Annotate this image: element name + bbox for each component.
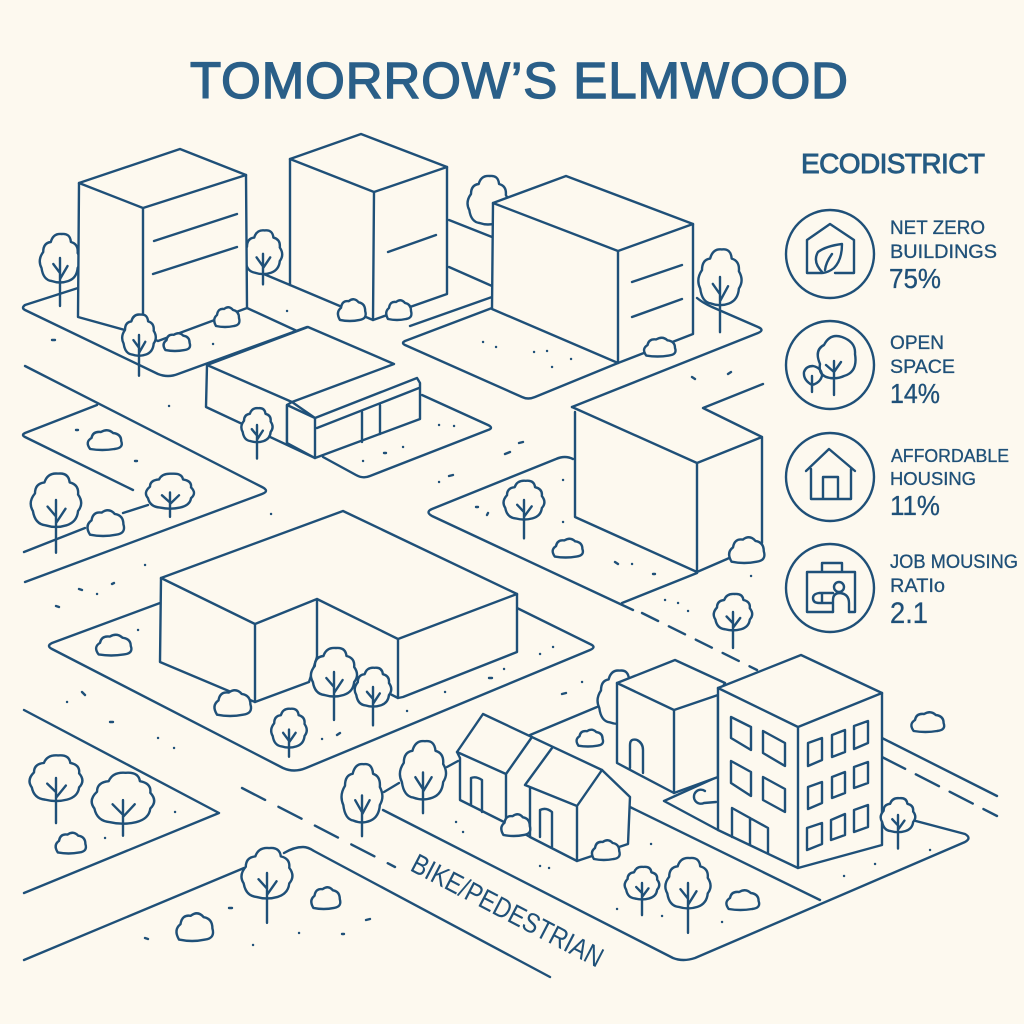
metric: net zero buildings: BUILDINGS: [890, 242, 997, 263]
building: top centre tower: [290, 134, 447, 320]
metric: net zero buildings: 75%: [889, 263, 941, 294]
metric: affordable housing: HOUSING: [890, 469, 976, 489]
metric: open space: [786, 321, 955, 409]
building: top left tower: [78, 149, 247, 341]
metric: open space: 14%: [890, 378, 940, 409]
building: four storey apartments: [718, 655, 882, 868]
street blocks: [23, 220, 997, 977]
shrubs: [56, 299, 944, 941]
metric: affordable housing: 11%: [890, 490, 940, 521]
metric: affordable housing: AFFORDABLE: [891, 446, 1009, 466]
building: two gabled houses: [457, 714, 630, 861]
metric: job housing ratio: JOB MOUSING: [890, 552, 1018, 573]
metric: open space: OPEN: [890, 333, 944, 354]
metric: affordable housing: [786, 433, 1009, 521]
windows: [731, 717, 868, 853]
trees behind buildings: [40, 176, 638, 724]
trees: [30, 249, 915, 933]
metric: job housing ratio: RATIo: [890, 576, 945, 597]
building: large central block: [160, 511, 517, 702]
building: low shopfront: [206, 327, 420, 458]
panel heading: ECODISTRICT: [801, 148, 985, 179]
metric: open space: SPACE: [890, 357, 955, 378]
panel: ecodistrict metrics: [786, 148, 1018, 632]
building: L-shaped block: [572, 384, 763, 572]
metric: job housing ratio: [786, 544, 1018, 632]
title: TOMORROW’S ELMWOOD: [190, 52, 848, 109]
metric: net zero buildings: [786, 210, 997, 298]
metric: job housing ratio: 2.1: [890, 597, 928, 630]
metric: net zero buildings: NET ZERO: [890, 218, 985, 239]
building: small annex: [617, 660, 725, 793]
pavement dots: [52, 311, 930, 945]
bike lane label: BIKE/PEDESTRIAN: [406, 848, 609, 973]
building: top right block: [492, 176, 693, 363]
